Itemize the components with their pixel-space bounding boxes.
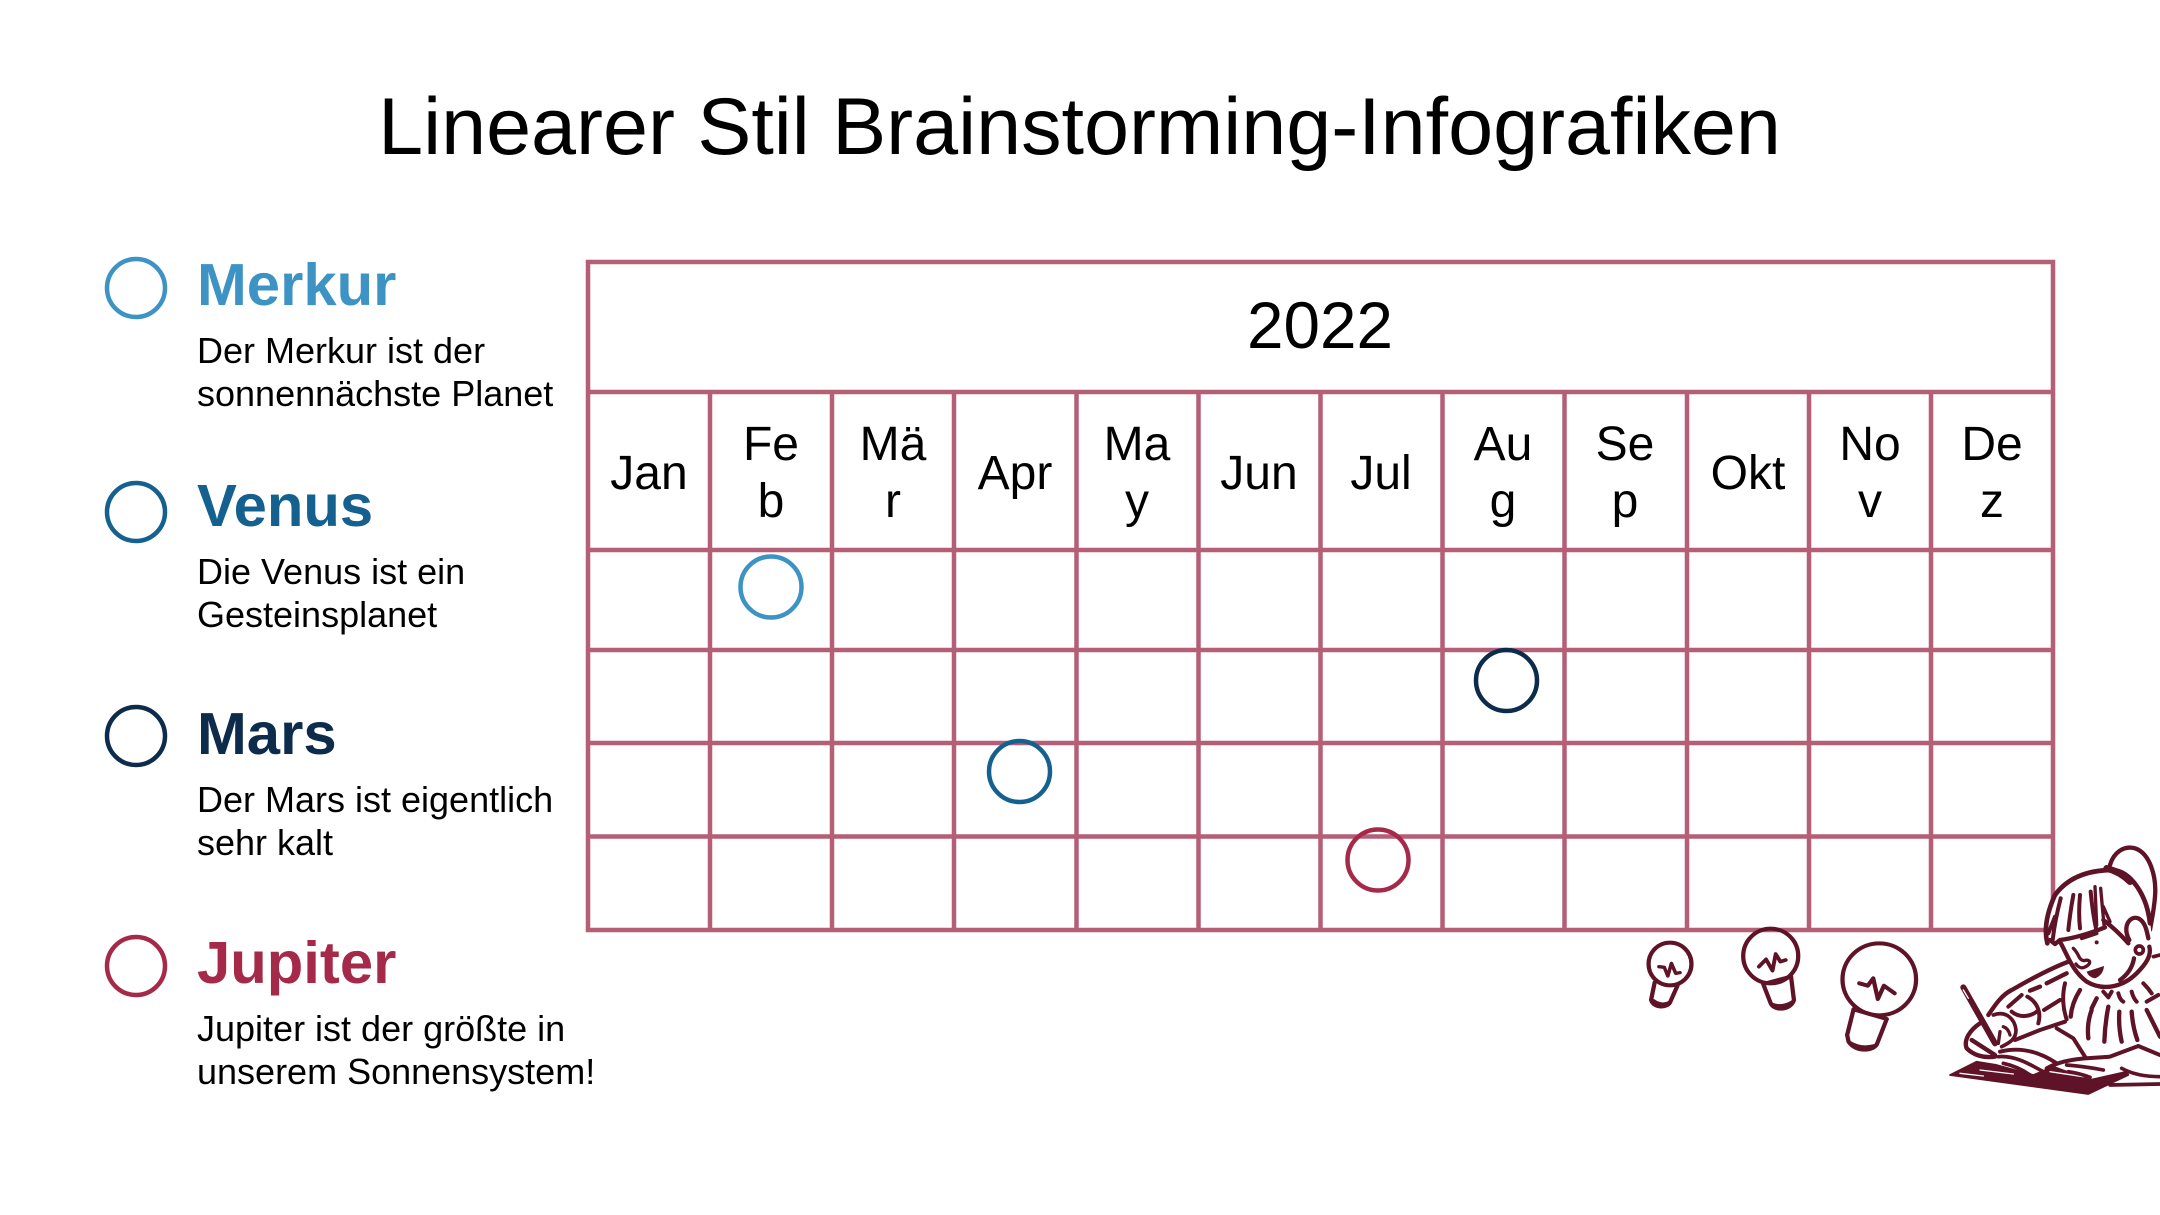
legend: Mars: Mars xyxy=(197,700,337,767)
month labels: g xyxy=(1490,475,1516,528)
legend: Merkur: Der Merkur ist der xyxy=(197,330,485,371)
legend: Jupiter: unserem Sonnensystem! xyxy=(197,1051,595,1092)
marker: Venus in Apr xyxy=(989,741,1050,802)
month labels: Apr xyxy=(978,447,1052,500)
month labels: Mä xyxy=(860,418,927,471)
month labels: Ma xyxy=(1104,418,1171,471)
marker: Jupiter in Jul xyxy=(1348,830,1408,890)
icon: small light bulb xyxy=(1649,943,1691,1006)
month labels: Fe xyxy=(743,418,799,471)
month labels: Jun xyxy=(1220,447,1298,500)
icon: large light bulb xyxy=(1842,943,1916,1050)
month labels: r xyxy=(885,475,901,528)
month labels: p xyxy=(1612,475,1638,528)
month labels: Okt xyxy=(1711,447,1785,500)
month labels: Se xyxy=(1596,418,1654,471)
calendar grid xyxy=(586,260,2055,932)
legend: Venus: Die Venus ist ein xyxy=(197,551,465,592)
legend: Mars xyxy=(107,700,553,863)
legend: Venus: Venus xyxy=(197,472,373,539)
illustration: girl writing in a notebook xyxy=(1950,848,2160,1094)
month labels xyxy=(610,418,2023,528)
month labels: v xyxy=(1858,475,1882,528)
month labels: Au xyxy=(1474,418,1532,471)
month labels: No xyxy=(1839,418,1901,471)
legend: Merkur: sonnennächste Planet xyxy=(197,373,553,414)
month labels: y xyxy=(1125,475,1149,528)
marker: Merkur in Feb xyxy=(740,556,802,618)
title: Linearer Stil Brainstorming-Infografiken xyxy=(378,82,1781,172)
marker: Mars in Aug xyxy=(1476,650,1537,711)
legend: Venus xyxy=(107,472,465,635)
legend: Jupiter: Jupiter ist der größte in xyxy=(197,1008,565,1049)
month labels: Jul xyxy=(1350,447,1412,500)
legend: Jupiter: Jupiter xyxy=(197,929,396,996)
month labels: z xyxy=(1980,475,2004,528)
month labels: b xyxy=(758,475,784,528)
legend: Jupiter xyxy=(107,929,595,1092)
month labels: Jan xyxy=(610,447,688,500)
legend: Mars: sehr kalt xyxy=(197,822,333,863)
month labels: De xyxy=(1961,418,2023,471)
legend: Merkur xyxy=(107,251,553,414)
year heading: 2022 xyxy=(1247,289,1393,362)
icon: medium light bulb xyxy=(1743,929,1798,1009)
legend: Mars: Der Mars ist eigentlich xyxy=(197,779,553,820)
legend: Venus: Gesteinsplanet xyxy=(197,594,437,635)
legend: Merkur: Merkur xyxy=(197,251,396,318)
